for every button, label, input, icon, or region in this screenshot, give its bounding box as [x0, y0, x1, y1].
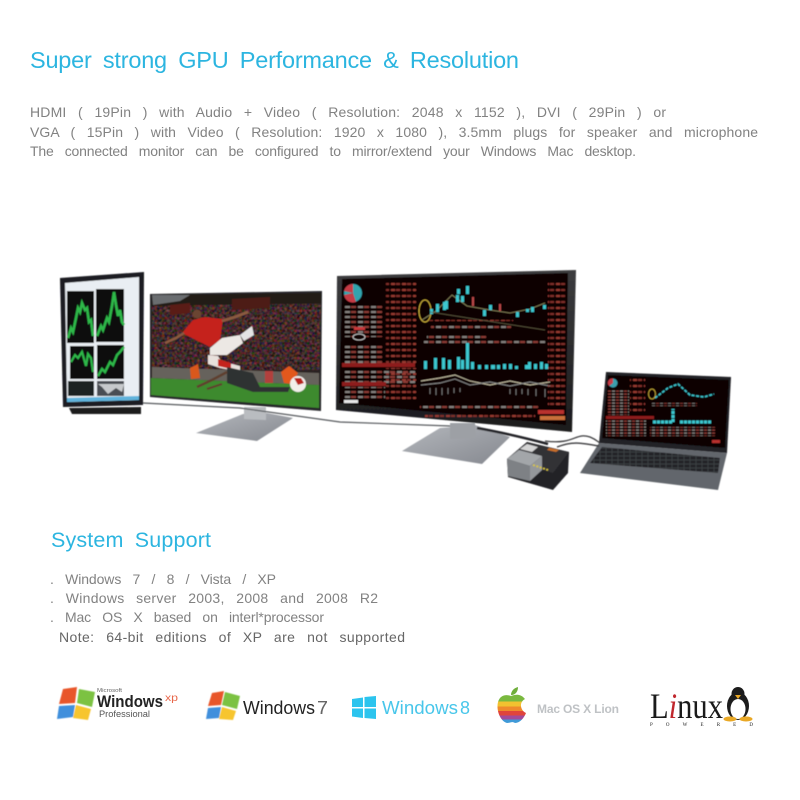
text block: video outputs description: The connected monitor can be configured to mirror/extend your Windows Mac desktop.	[30, 143, 636, 159]
monitor: stock market terminal	[336, 270, 576, 464]
logo: Windows XP: xp	[165, 693, 179, 704]
heading: GPU performance: Super strong GPU Performance & Resolution	[30, 47, 519, 73]
candlestick chart	[419, 286, 546, 343]
logo: Windows XP: Microsoft	[97, 688, 123, 694]
text block: video outputs description	[30, 104, 758, 159]
logo: Windows XP: Professional	[99, 709, 150, 719]
cables to laptop	[545, 436, 600, 447]
logo: Windows 7	[206, 691, 328, 720]
MACD lines	[421, 375, 550, 397]
logo: Windows XP: Windows	[97, 692, 163, 711]
note: 64-bit: Note: 64-bit editions of XP are not supported	[59, 629, 405, 645]
list: supported systems: . Windows 7 / 8 / Vista / XP	[50, 571, 276, 587]
infographic canvas	[30, 51, 758, 726]
cable from portrait monitor	[143, 403, 450, 426]
logo: Windows 8: Windows	[382, 698, 458, 718]
logo: Windows XP	[57, 687, 179, 720]
pie chart	[344, 284, 362, 303]
logo: Linux powered: POWERED	[650, 723, 753, 728]
list: supported systems: . Windows server 2003, 2008 and 2008 R2	[50, 590, 378, 606]
logo: Mac OS X Lion: Mac OS X Lion	[537, 702, 619, 716]
right scale column	[548, 281, 565, 406]
text block: video outputs description: VGA ( 15Pin ) with Video ( Resolution: 1920 x 1080 ), 3.5mm plugs for speaker and microphone	[30, 124, 758, 140]
docking box	[477, 428, 569, 490]
football players	[165, 310, 306, 392]
list: supported systems: . Mac OS X based on interl*processor	[50, 609, 324, 625]
logo: Windows 7: 7	[317, 698, 328, 718]
logo: Windows 8	[352, 696, 470, 719]
monitor: football match	[150, 291, 322, 441]
logo: Mac OS X Lion	[497, 687, 619, 723]
monitor: portrait with charts	[60, 272, 144, 414]
icon: penguin	[724, 687, 752, 722]
volume bars	[424, 343, 548, 369]
logo: Windows 7: Windows	[243, 698, 315, 718]
heading: system support: System Support	[51, 528, 211, 552]
logo: Windows 8: 8	[460, 698, 470, 718]
text block: video outputs description: HDMI ( 19Pin ) with Audio + Video ( Resolution: 2048 x 1152 ), DVI ( 29Pin ) or	[30, 104, 666, 120]
illustration: monitors, docking box and laptop	[60, 270, 731, 490]
bottom status bar	[344, 400, 565, 420]
left data tables	[342, 281, 416, 403]
list: supported systems	[50, 571, 405, 645]
laptop	[580, 372, 731, 490]
logo: Linux powered: Linux	[650, 686, 723, 726]
